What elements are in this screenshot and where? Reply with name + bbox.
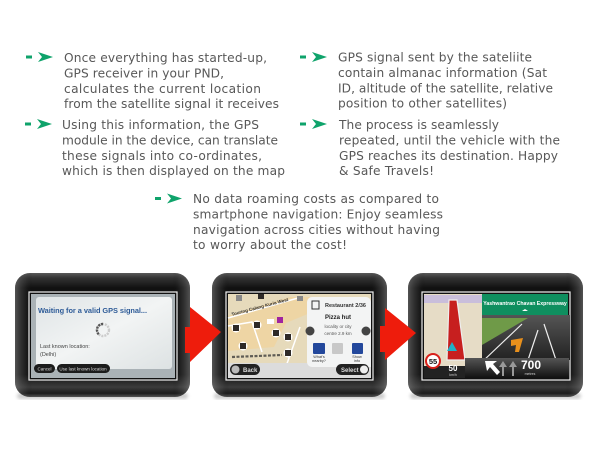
button: select [336, 364, 369, 375]
button: back: Back [243, 368, 258, 374]
left map [424, 294, 482, 378]
distance: 700 [521, 358, 541, 372]
text: almanac information: position to other satellites) [338, 96, 507, 110]
text: almanac information: GPS signal sent by the sateliite [338, 50, 532, 64]
block 5: no roaming [155, 192, 443, 252]
icon: turn arrows [485, 361, 517, 376]
popup card: nearby? [312, 359, 326, 363]
block 3: almanac [300, 50, 553, 110]
popup card: What's [313, 355, 325, 359]
popup card: locality or city [324, 324, 352, 329]
button: cancel: Cancel [37, 366, 52, 372]
speed value: km/h [449, 373, 457, 377]
bottom info bar [465, 358, 569, 378]
text: co-ordinates: module in the device, can translate [62, 134, 278, 148]
block 2: translate [25, 118, 285, 178]
icon: green arrow 4 [300, 119, 327, 129]
speed value [449, 364, 458, 377]
block 4: repeated [300, 118, 560, 178]
icon: green arrow 5 [155, 194, 182, 204]
text: data roaming: to worry about the cost! [193, 238, 347, 252]
text: location calculation: GPS receiver in your PND, [64, 66, 224, 80]
icon: green arrow 1 [26, 52, 53, 62]
text: co-ordinates: these signals into co-ordinates, [62, 149, 262, 163]
button: back [230, 364, 260, 375]
device 1: waiting for signal [15, 273, 190, 399]
arrow: red 1 to 2 [185, 307, 221, 362]
sign: expressway: Yashwantrao Chavan Expressway [483, 301, 567, 307]
text: data roaming: navigation across cities without having [193, 223, 440, 237]
text: location calculation: Once everything has started-up, [64, 51, 267, 65]
button: cancel [34, 364, 55, 373]
popup card: centre 2.9 km [324, 331, 352, 336]
icon: position marker [447, 342, 457, 351]
icon: spinner [97, 324, 109, 336]
speed sign: 55 [429, 357, 437, 366]
popup card [306, 297, 371, 367]
icon: green arrow 3 [300, 52, 327, 62]
text: last known: Last known location: [40, 344, 90, 350]
sign: expressway [482, 294, 568, 315]
distance: metres [525, 372, 536, 376]
speed value: 50 [449, 364, 458, 373]
text: location calculation: calculates the current location [64, 82, 261, 96]
button: last known [57, 364, 110, 373]
text: almanac information: ID, altitude of the satellite, relative [338, 82, 553, 96]
text: safe travels: repeated, until the vehicle with the [339, 134, 560, 148]
popup card: Show [352, 355, 362, 359]
popup card: info [354, 359, 360, 363]
right road view [482, 315, 570, 360]
icon: direction [511, 338, 523, 352]
text: safe travels: The process is seamlessly [338, 118, 499, 132]
device 3: navigation [408, 273, 583, 399]
map screen [228, 294, 371, 378]
text: data roaming: No data roaming costs as compared to [193, 192, 439, 206]
popup card: Pizza hut [325, 315, 351, 321]
map details [228, 294, 310, 372]
route [447, 300, 465, 360]
map details: Touring Calang Kuria West [231, 297, 289, 317]
button: last known: Use last known location [59, 366, 107, 372]
text: last known: (Delhi) [40, 352, 56, 358]
text: data roaming: smartphone navigation: Enjoy seamless [193, 208, 443, 222]
text: almanac information: contain almanac information (Sat [338, 66, 547, 80]
button: select: Select [341, 368, 359, 374]
block 1: started-up [26, 51, 279, 111]
heading: waiting: Waiting for a valid GPS signal... [38, 306, 147, 315]
text: location calculation: from the satellite signal it receives [64, 97, 279, 111]
device 2: map [212, 273, 387, 399]
text: co-ordinates: which is then displayed on the map [62, 164, 285, 178]
bottom bar [228, 363, 371, 378]
text: safe travels: GPS reaches its destination. Happy [339, 149, 558, 163]
icon: green arrow 2 [25, 119, 52, 129]
text: safe travels: & Safe Travels! [339, 164, 434, 178]
popup card: Restaurant 2/36 [325, 303, 366, 309]
arrow: red 2 to 3 [380, 308, 416, 360]
speed sign [426, 354, 440, 368]
text: co-ordinates: Using this information, the GPS [62, 118, 259, 132]
screen 1 [31, 294, 175, 378]
